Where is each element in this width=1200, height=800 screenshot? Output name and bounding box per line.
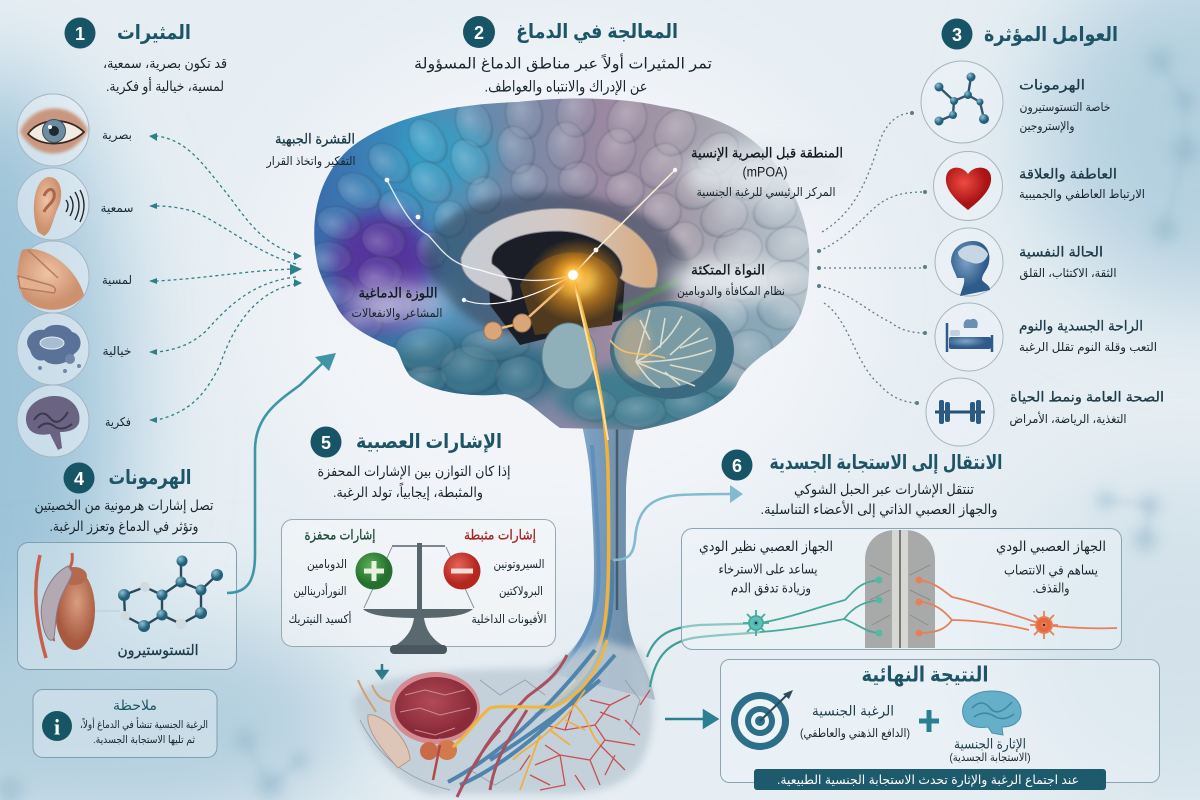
pelvic anatomy: [352, 623, 760, 797]
section badge 4: 4: [74, 469, 84, 489]
label: prefrontal cortex: التفكير واتخاذ القرار: [266, 154, 356, 169]
autonomic nervous card: [682, 528, 1122, 650]
panel: influencing factors: [817, 18, 1164, 446]
red vessel network: [520, 690, 650, 790]
hormones description: [34, 497, 214, 535]
section badge 3: [942, 18, 972, 50]
pelvic and nerve pathway lines: [387, 170, 675, 707]
section badge 2: 2: [474, 23, 484, 43]
stimuli description: قد تكون بصرية، سمعية،: [103, 55, 227, 72]
section badge 5: [310, 426, 342, 458]
inhibitory list: الأفيونات الداخلية: [472, 611, 546, 627]
text: والإستروجين: [1020, 119, 1074, 134]
panel: stimuli: [17, 18, 302, 457]
panel: brain processing: [266, 16, 853, 323]
label: mPOA: المنطقة قبل البصرية الإنسية: [691, 146, 843, 162]
heading: influencing factors: العوامل المؤثرة: [984, 24, 1118, 46]
section badge 5: 5: [321, 433, 331, 453]
label: mental: فكرية: [105, 415, 131, 430]
section badge 2: [463, 16, 495, 48]
label: prefrontal cortex: [266, 132, 356, 169]
parasympathetic text: يساعد على الاسترخاء: [718, 562, 818, 578]
response description: تنتقل الإشارات عبر الحبل الشوكي: [794, 481, 974, 498]
note text: الرغبة الجنسية تنشأ في الدماغ أولاً،: [80, 717, 208, 731]
icon: thought cloud: [17, 313, 89, 385]
label: auditory: سمعية: [100, 201, 134, 215]
panel: final result: [720, 660, 1160, 790]
note box: [33, 690, 217, 758]
spinal cord: [535, 405, 655, 715]
icon: eye: [17, 94, 89, 166]
processing description: تمر المثيرات أولاً عبر مناطق الدماغ المسؤولة: [414, 53, 712, 72]
icon: dumbbell: [926, 378, 994, 446]
icon: molecule: [921, 61, 1003, 143]
plus signal: [356, 552, 392, 590]
inhibitory list: [472, 557, 546, 627]
brain illustration: [300, 88, 820, 707]
signals description: والمثبطة، إيجابياً، تولد الرغبة.: [333, 482, 483, 501]
sympathetic neuron: [916, 576, 1117, 639]
testosterone card: [18, 542, 236, 670]
icon: heart: [934, 152, 1002, 220]
text: التعب وقلة النوم تقلل الرغبة: [1019, 340, 1157, 355]
bladder: [390, 672, 480, 748]
section badge 6: [722, 450, 752, 480]
panel: transition to physical response: [613, 450, 1160, 790]
heading: stimuli: المثيرات: [117, 22, 191, 44]
gland and prostate: [358, 680, 457, 780]
heading: brain processing: المعالجة في الدماغ: [516, 21, 678, 44]
result heading: النتيجة النهائية: [862, 664, 988, 686]
response description: [760, 481, 998, 518]
label: tactile: لمسية: [102, 273, 132, 287]
limbic interior: [425, 193, 690, 345]
corpus callosum: [461, 208, 657, 302]
stimuli description: لمسية، خيالية أو فكرية.: [106, 77, 224, 95]
icon: light blue brain: [963, 691, 1021, 735]
icon: brain thought: [17, 385, 89, 457]
panel: hormones: [18, 353, 336, 758]
icon: info: i: [54, 714, 60, 740]
inhibitory list: البرولاكتين: [499, 584, 543, 599]
icon: testosterone molecule: [118, 556, 223, 632]
text: الهرمونات: [1019, 78, 1085, 94]
note text: ثم تليها الاستجابة الجسدية.: [93, 734, 195, 746]
heading: physical response: الانتقال إلى الاستجابة الجسدية: [770, 452, 1002, 474]
text: العاطفة والعلاقة: [1019, 166, 1117, 182]
parasympathetic text: وزيادة تدفق الدم: [731, 580, 811, 596]
arousal text: الإثارة الجنسية: [954, 736, 1026, 752]
label: testosterone: التستوستيرون: [118, 643, 198, 659]
sympathetic text: والقذف.: [1032, 580, 1070, 596]
signals description: [318, 463, 511, 501]
stimuli description: [103, 55, 227, 95]
spinal cord section: [865, 530, 935, 648]
teal nerves to autonomic panel: [647, 623, 760, 687]
label: imaginative: خيالية: [102, 344, 132, 358]
factor: hormones: [921, 61, 1110, 143]
text: التغذية، الرياضة، الأمراض: [1010, 411, 1126, 427]
heading: hormones: الهرمونات: [108, 467, 192, 489]
arrowhead: hormones to brain: [315, 353, 336, 371]
text: خاصة التستوستيرون: [1020, 100, 1110, 115]
factor: rest and sleep: [935, 303, 1157, 371]
signals description: إذا كان التوازن بين الإشارات المحفزة: [318, 463, 511, 480]
label: amygdala: [345, 283, 449, 323]
arrow: hormones to brain: [227, 358, 328, 593]
excitatory list: النورأدرينالين: [294, 583, 346, 599]
icon: touching hands: [17, 241, 89, 313]
label: amygdala: المشاعر والانفعالات: [352, 306, 442, 321]
processing description: عن الإدراك والانتباه والعواطف.: [484, 78, 648, 96]
label: amygdala: اللوزة الدماغية: [358, 286, 438, 302]
balance scale: [363, 543, 474, 654]
cerebrum: [314, 98, 810, 430]
icon: head silhouette: [935, 228, 1003, 296]
minus signal: [444, 552, 480, 590]
text: الحالة النفسية: [1019, 244, 1103, 260]
arrow: down to pelvis: [377, 664, 387, 678]
arrows: stimuli to brain: [149, 133, 302, 423]
desire text: الرغبة الجنسية: [812, 704, 894, 720]
excitatory list: [288, 557, 352, 627]
label: nucleus accumbens: نظام المكافأة والدوبامين: [677, 282, 785, 299]
panel: nerve signals: [282, 426, 556, 678]
processing description: [414, 53, 712, 96]
icon: ear: [17, 168, 89, 240]
label: prefrontal cortex: القشرة الجبهية: [275, 132, 355, 148]
text: [1019, 318, 1157, 355]
amygdala nodes: [484, 314, 531, 340]
section badge 1: [64, 18, 96, 48]
inhibitory heading: إشارات مثبطة: [464, 528, 536, 544]
pons: [542, 323, 596, 389]
tissue background: [352, 640, 653, 795]
factor: psychological state: [935, 228, 1116, 296]
icon: info: [42, 711, 72, 741]
parasympathetic neuron: [743, 576, 882, 636]
sympathetic text: يساهم في الانتصاب: [1004, 562, 1098, 578]
icon: bed: [935, 303, 1003, 371]
section badge 3: 3: [952, 25, 962, 45]
plus sign: [919, 710, 939, 732]
label: mPOA: المركز الرئيسي للرغبة الجنسية: [696, 185, 836, 200]
cerebellum: [610, 281, 734, 399]
arousal text: [950, 736, 1030, 764]
arrow: to final result: [665, 711, 717, 727]
conclusion banner: عند اجتماع الرغبة والإثارة تحدث الاستجابة الجنسية الطبيعية.: [777, 773, 1079, 788]
response description: والجهاز العصبي الذاتي إلى الأعضاء التناسلية.: [760, 500, 998, 518]
section badge 1: 1: [75, 24, 85, 44]
conclusion banner: [754, 769, 1106, 790]
label: nucleus accumbens: [668, 258, 792, 302]
icon: testis: [36, 553, 120, 658]
label: visual: بصرية: [102, 128, 132, 143]
text: الراحة الجسدية والنوم: [1019, 318, 1143, 334]
note text: [80, 717, 208, 746]
arousal text: (الاستجابة الجسدية): [950, 752, 1030, 764]
icon: target: [731, 690, 793, 750]
factor: general health: [926, 378, 1164, 446]
sympathetic text: الجهاز العصبي الودي: [996, 538, 1106, 555]
excitatory heading: إشارات محفزة: [304, 528, 376, 544]
factors dotted connectors: [817, 111, 927, 405]
arrow: cord to response: [613, 494, 730, 560]
text: الثقة، الاكتئاب، القلق: [1020, 266, 1116, 281]
parasympathetic text: الجهاز العصبي نظير الودي: [699, 538, 833, 555]
arrowhead: cord to response: [730, 485, 743, 503]
label: mPOA: [683, 144, 853, 200]
text: الارتباط العاطفي والجميبية: [1019, 187, 1145, 202]
excitatory list: أكسيد النيتريك: [288, 611, 352, 627]
label: mPOA: (mPOA): [742, 164, 788, 180]
signal glow: [385, 168, 677, 302]
text: [1010, 390, 1164, 427]
hormones description: وتؤثر في الدماغ وتعزز الرغبة.: [50, 518, 198, 535]
label: nucleus accumbens: النواة المتكئة: [691, 262, 765, 278]
sympathetic text: [996, 538, 1106, 596]
hormones description: تصل إشارات هرمونية من الخصيتين: [34, 497, 214, 514]
desire text: [800, 704, 910, 741]
text: [1019, 166, 1145, 202]
tissue net lines: [360, 680, 640, 790]
excitatory list: الدوبامين: [307, 557, 347, 572]
text: الصحة العامة ونمط الحياة: [1010, 390, 1164, 406]
blood vessels and nerves: [448, 640, 615, 797]
signals balance card: [282, 520, 556, 654]
parasympathetic text: [699, 538, 833, 596]
factor: emotion: [934, 152, 1145, 220]
note heading: ملاحظة: [113, 697, 157, 713]
section badge 4: [64, 462, 94, 494]
heading: nerve signals: الإشارات العصبية: [356, 431, 502, 453]
text: [1019, 244, 1116, 281]
desire text: (الدافع الذهني والعاطفي): [800, 726, 910, 741]
section badge 6: 6: [732, 456, 742, 476]
inhibitory list: السيروتونين: [494, 557, 544, 572]
text: [1019, 78, 1110, 134]
